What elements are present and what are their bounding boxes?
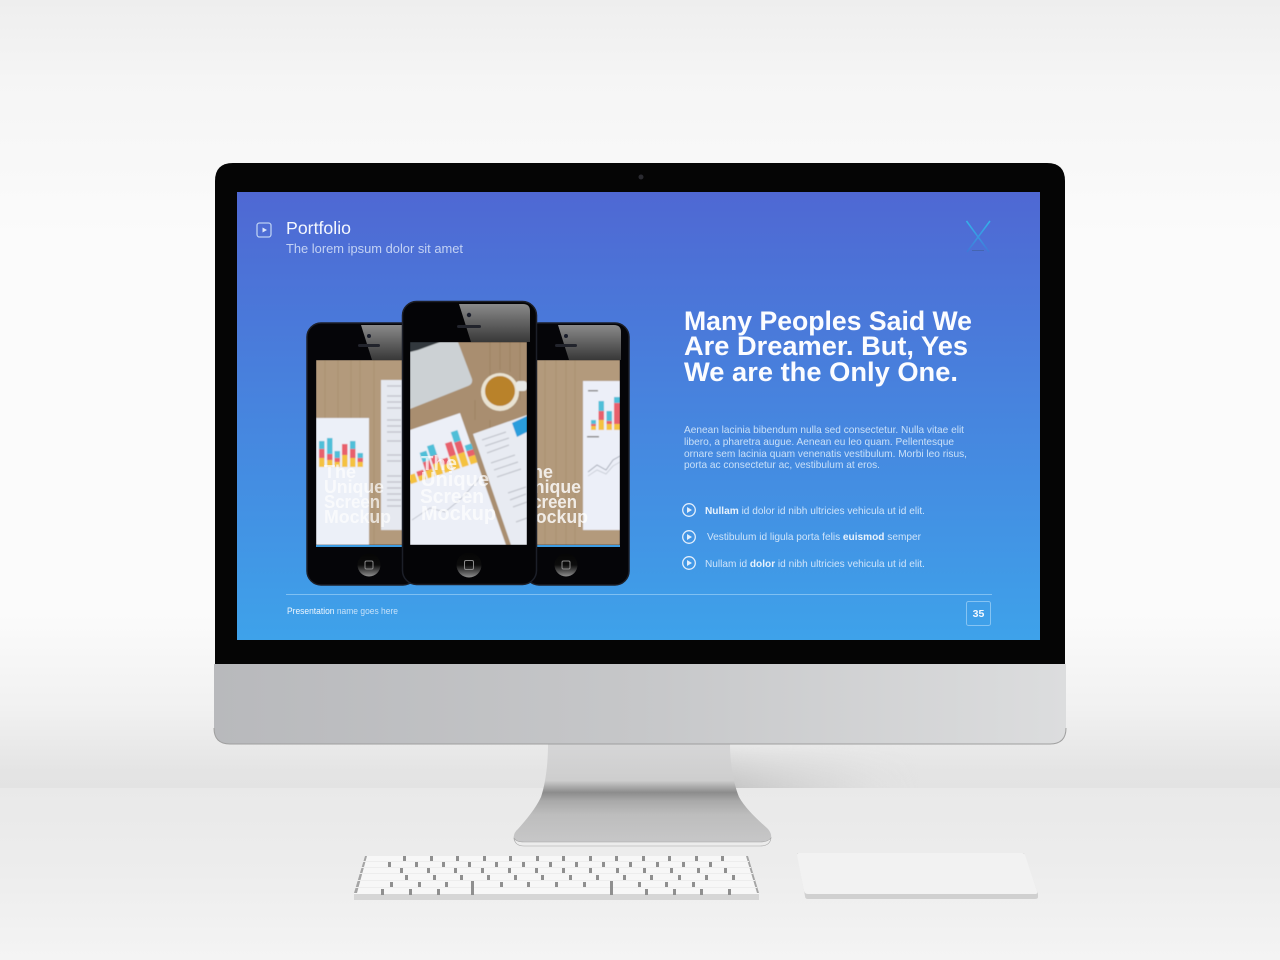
centre phone caption [420,453,496,525]
right phone screen photo [537,360,620,547]
right phone caption [537,468,587,527]
body paragraph [684,424,967,471]
left phone caption [324,462,391,527]
right phone caption: Unique [521,477,581,497]
chin bottom edge [214,728,1066,744]
left phone caption: Screen [324,492,380,512]
centre phone caption: The [421,453,457,475]
left phone screen photo [316,360,405,548]
right phone caption: Screen [521,492,577,512]
bullet 1: Nullam id dolor id nibh ultricies vehicula ut id elit. [705,505,925,517]
left phone caption: Mockup [324,507,391,527]
trackpad [797,853,1038,899]
monitor [214,163,1066,744]
main heading: We are the Only One. [684,357,958,387]
body paragraph: porta ac consectetur ac, vestibulum at eros. [684,459,880,471]
icon: play square [257,223,271,237]
centre phone caption: Screen [420,486,484,508]
body paragraph: libero, a pharetra augue. Aenean eu leo quam. Pellentesque [684,436,954,448]
page number box [966,602,990,626]
right phone caption: Mockup [521,507,588,527]
bullet 3: Nullam id dolor id nibh ultricies vehicula ut id elit. [705,558,925,570]
phone mockups [307,302,629,585]
monitor stand [514,744,771,846]
main heading [684,306,972,387]
footer divider [286,594,992,595]
right phone caption: The [521,462,553,482]
main heading: Are Dreamer. But, Yes [684,331,968,361]
stand shadow on wall [730,754,842,788]
left phone [307,323,417,585]
infographic scene [0,159,1280,900]
webcam [638,174,644,180]
keyboard key gaps [381,856,735,895]
keyboard [354,856,759,900]
bullet 2: Vestibulum id ligula porta felis euismod semper [707,531,921,543]
slide screen [237,192,1040,640]
slide subtitle: The lorem ipsum dolor sit amet [286,241,463,256]
centre phone [399,302,536,584]
bullet list [683,504,925,570]
body paragraph: Aenean lacinia bibendum nulla sed consectetur. Nulla vitae elit [684,424,964,436]
desk surface [0,788,1280,960]
left phone caption: The [324,462,356,482]
left phone caption: Unique [324,477,384,497]
footer text: Presentation name goes here [287,606,398,617]
right phone [521,323,629,585]
page number box: 35 [973,608,984,620]
centre phone caption: Mockup [421,503,496,525]
body paragraph: ornare sem lacinia quam venenatis vestibulum. Morbi leo risus, [684,448,967,460]
logo: X mark [966,221,990,252]
monitor chin [214,664,1066,744]
centre phone screen photo [399,342,527,545]
main heading: Many Peoples Said We [684,306,972,336]
centre phone caption: Unique [421,469,489,491]
keyboard key rows [355,862,757,888]
monitor bezel [215,163,1065,664]
slide title: Portfolio [286,218,351,238]
